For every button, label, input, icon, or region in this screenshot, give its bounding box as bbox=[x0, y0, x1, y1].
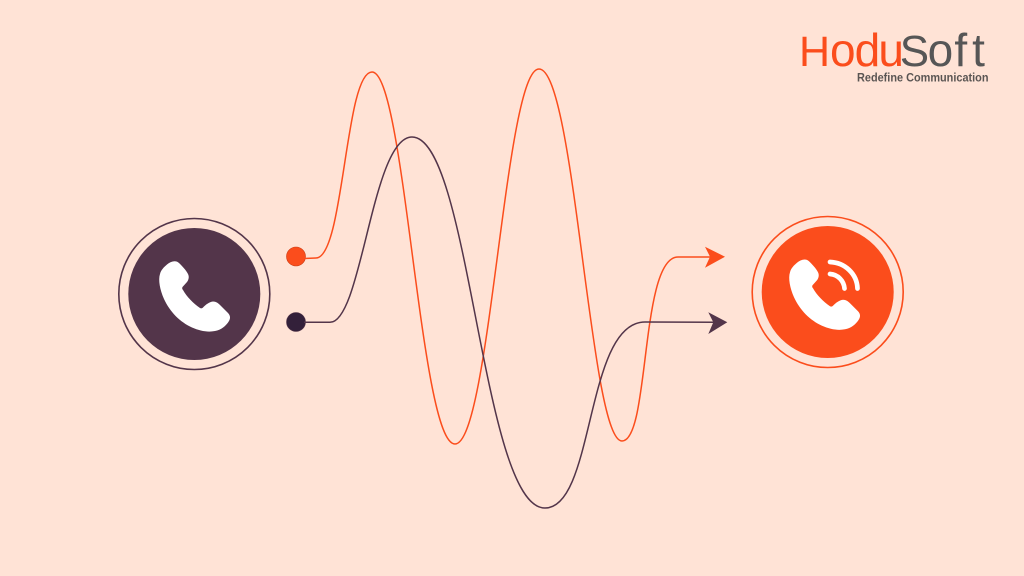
purple waveform with arrow bbox=[304, 137, 727, 508]
receiver icon: orange ringing phone bbox=[752, 216, 903, 368]
logo wordmark: odu bbox=[830, 24, 904, 76]
logo wordmark: oft bbox=[928, 24, 985, 76]
logo: HoduSoft bbox=[799, 24, 988, 84]
signal waves bbox=[830, 262, 858, 288]
orange start dot bbox=[286, 247, 306, 266]
orange waveform with arrow bbox=[304, 69, 725, 444]
caller icon: purple phone bbox=[119, 218, 270, 370]
logo tagline: Redefine Communication bbox=[857, 72, 988, 84]
logo wordmark: S bbox=[900, 27, 929, 76]
logo wordmark: H bbox=[799, 28, 830, 76]
purple start dot bbox=[286, 312, 306, 332]
